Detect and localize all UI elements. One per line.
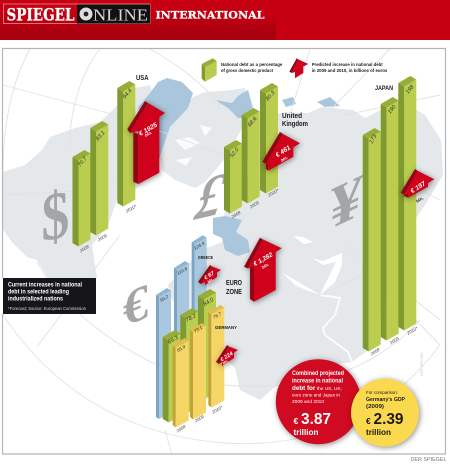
chart: Japan bars: 2008: [369, 347, 381, 357]
arrow: USA increase: [127, 101, 165, 184]
chart: USA bars: 70.7: [77, 155, 89, 168]
label: United Kingdom: United: [282, 113, 302, 120]
chart: Japan bars: 2009: [388, 336, 400, 346]
chart: USA bars: 2010*: [124, 204, 137, 214]
arrow: Greece increase: bln.: [207, 277, 214, 284]
caption box: industrialized nations: [8, 296, 64, 302]
icon: green bar: [202, 58, 217, 82]
legend text: national debt: National debt as a percentage: [221, 62, 283, 68]
land: Eurasia and Africa: [168, 100, 443, 400]
chart: UK bars: 2009: [248, 200, 260, 210]
label: Japan: JAPAN: [375, 85, 393, 92]
icon: red arrow: [289, 58, 308, 78]
arrow: Japan increase: [401, 169, 434, 198]
circle: combined increase: increase in national: [292, 378, 343, 384]
label: Greece: GREECE: [198, 255, 213, 260]
label: Euro zone: EURO: [226, 280, 242, 287]
chart: UK bars: 2008: [230, 210, 242, 220]
arrow: Euro zone increase: € 1,282: [252, 251, 275, 268]
chart: Euro zone bars: [156, 235, 224, 434]
bars: Germany: [173, 305, 224, 428]
bar: UK 2008: [224, 140, 242, 214]
sea: northern waters: [215, 90, 340, 118]
bars: Germany: 73.1: [193, 325, 204, 334]
bars: Greece: [156, 235, 207, 419]
legend text: national debt: [221, 62, 283, 74]
currency symbol: dollar: $: [42, 175, 69, 256]
bar: USA 2010: [117, 81, 135, 206]
caption box: Current increases in national: [8, 283, 82, 289]
bars: Greece: 124.9: [193, 241, 206, 251]
logo: Spiegel Online: [4, 4, 150, 24]
bars: Greece: 99.2: [159, 294, 170, 303]
circle: Germany GDP comparison: trillion: [366, 427, 391, 437]
sea: Red Sea and Gulf streaks: [283, 236, 352, 362]
chart: Japan bars: 2010*: [405, 326, 419, 336]
circle: combined increase: debt for the US, UK,: [292, 386, 342, 392]
legend: [202, 58, 388, 82]
arrow: Japan increase: € 197: [409, 180, 427, 195]
chart: Euro zone bars: 2009: [193, 414, 205, 424]
arrow: Germany increase: [216, 345, 238, 366]
chart: USA bars: [72, 81, 137, 254]
bars: Germany: 76.7: [212, 311, 223, 320]
chart: Euro zone bars: 2010*: [210, 405, 224, 415]
arrow: Euro zone increase: bln.: [261, 262, 270, 270]
chart: USA bars: 83.1: [95, 130, 107, 142]
arrow: USA increase: € 1925: [138, 122, 159, 138]
chart: USA bars: 94.4: [122, 88, 134, 100]
logo: Spiegel Online: NLINE: [93, 6, 148, 24]
land: North America: [3, 85, 160, 278]
bars: Euro zone: 84.0: [202, 297, 216, 308]
heading: International: INTERNATIONAL: [156, 10, 265, 22]
legend text: national debt: of gross domestic product: [221, 68, 273, 74]
chart: USA bars: 2008: [78, 244, 90, 254]
land: Arctic and Greenland: [158, 88, 250, 188]
chart: Japan bars: [363, 76, 419, 357]
sea: European waters: [213, 216, 250, 256]
caption box: debt in selected leading: [8, 290, 69, 296]
legend text: predicted increase: Predicted increase in national debt: [312, 62, 383, 68]
bar: USA 2008: [72, 150, 90, 246]
label: United Kingdom: Kingdom: [282, 121, 308, 128]
credit: vertical: DER SPIEGEL: [420, 352, 424, 376]
circle: Germany GDP comparison: For comparison:: [366, 390, 398, 396]
chart: Japan bars: 173: [369, 133, 379, 145]
logo: Spiegel Online: SPIEGEL: [6, 6, 75, 24]
bar: USA 2009: [90, 121, 108, 236]
arrow: Germany increase: bln.: [222, 359, 229, 365]
sea: Hudson Bay: [138, 78, 193, 162]
chart: USA bars: 2009: [96, 233, 108, 243]
label: Euro zone: [226, 280, 242, 296]
circle: combined increase: Combined projected: [292, 371, 344, 377]
label: Germany: GERMANY: [215, 325, 238, 331]
bars: Euro zone: [163, 289, 216, 422]
chart: UK bars: 2010*: [266, 188, 280, 198]
arrow: UK increase: € 461: [274, 144, 292, 159]
currency symbol: yen: ¥: [327, 160, 366, 244]
bar: Japan 2009: [381, 97, 399, 340]
bar: Japan 2010: [398, 76, 416, 330]
bars: Euro zone: 78.2: [185, 313, 198, 324]
caption box: *Forecast; Source: European Commission: [8, 306, 86, 311]
chart: Japan bars: 198: [405, 84, 416, 95]
bar: UK 2009: [242, 108, 260, 204]
circle: Germany GDP comparison: €: [366, 416, 371, 426]
caption box: [3, 278, 96, 314]
currency symbol: euro: €: [123, 274, 148, 339]
chart: UK bars: [224, 83, 280, 220]
circle: combined increase: 2009 and 2010: [292, 399, 324, 404]
chart: UK bars: 52.0: [229, 146, 241, 159]
arrow: UK increase: [262, 132, 300, 171]
credit: Der Spiegel: DER SPIEGEL: [410, 457, 447, 463]
label: United Kingdom: [282, 113, 308, 128]
arrow: Greece increase: € 67: [203, 270, 216, 282]
circle: Germany GDP comparison: 2.39: [374, 411, 404, 428]
bars: Euro zone: 69.3: [167, 335, 180, 346]
islands: northern white inlets: [175, 125, 212, 166]
arrow: UK increase: bln.: [280, 155, 289, 163]
circle: combined increase: trillion: [294, 427, 318, 437]
bars: Greece: 110.6: [176, 266, 189, 276]
chart: UK bars: 80.3: [265, 89, 277, 102]
circle: combined increase: [276, 359, 361, 444]
bar: Japan 2008: [363, 128, 381, 352]
arrow: Germany increase: € 224: [220, 351, 234, 363]
circle: Germany GDP comparison: [351, 379, 419, 447]
chart: Euro zone bars: 2008: [175, 424, 187, 434]
circle: Germany GDP comparison: Germany's GDP: [366, 397, 405, 403]
arrow: Greece increase: [198, 265, 221, 285]
currency symbol: pound: £: [189, 159, 231, 234]
header banner: [0, 0, 450, 40]
circle: combined increase: euro zone and Japan in: [292, 392, 340, 398]
circle: combined increase: 3.87: [301, 411, 331, 428]
label: Japan billions: bln.: [415, 195, 424, 204]
bars: Germany: 65.9: [176, 344, 187, 353]
circle: Germany GDP comparison: (2009): [366, 404, 384, 410]
circle: combined increase: €: [294, 416, 298, 426]
chart: Japan bars: 190: [387, 104, 398, 115]
label: Euro zone: ZONE: [226, 289, 242, 296]
arrow: USA increase: bln.: [144, 130, 153, 138]
legend text: predicted increase: [312, 62, 388, 74]
label: USA: USA: [136, 75, 148, 82]
bar: UK 2010: [260, 83, 278, 194]
chart: UK bars: 68.6: [247, 115, 259, 128]
arrow: Euro zone increase: [244, 238, 282, 302]
legend text: predicted increase: in 2009 and 2010, in billions of euros: [312, 68, 388, 74]
